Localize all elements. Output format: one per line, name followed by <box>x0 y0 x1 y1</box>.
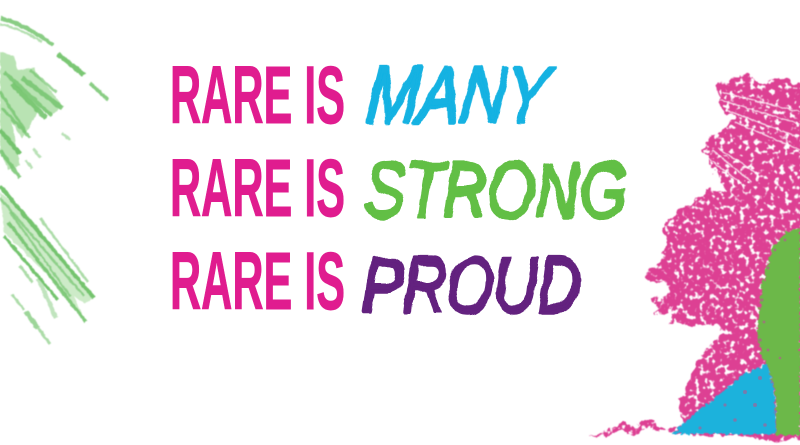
heading line 2: Rare is Strong <box>170 143 627 234</box>
text: STRONG: STRONG <box>365 146 627 234</box>
text: RARE IS: RARE IS <box>170 236 345 327</box>
paint: mixed colour specks <box>698 238 786 430</box>
heading line 3: Rare is Proud <box>170 236 581 329</box>
paint: pink brush stroke <box>590 78 800 440</box>
paint: blue brush stroke <box>672 364 776 434</box>
paint: white dry-brush streaks in pink <box>708 92 800 186</box>
brush splash: left green strokes <box>0 18 108 344</box>
text: RARE IS: RARE IS <box>170 50 345 141</box>
strokes: upper arc <box>0 18 108 100</box>
brush splash: right pink, green and blue paint <box>590 78 800 440</box>
text: RARE IS: RARE IS <box>170 143 345 234</box>
strokes: middle cluster <box>0 52 70 178</box>
paint: green brush stroke <box>757 228 800 435</box>
text: PROUD: PROUD <box>363 241 581 329</box>
heading line 1: Rare is Many <box>170 50 556 141</box>
strokes: lower band <box>0 186 94 344</box>
text: MANY: MANY <box>363 51 556 139</box>
